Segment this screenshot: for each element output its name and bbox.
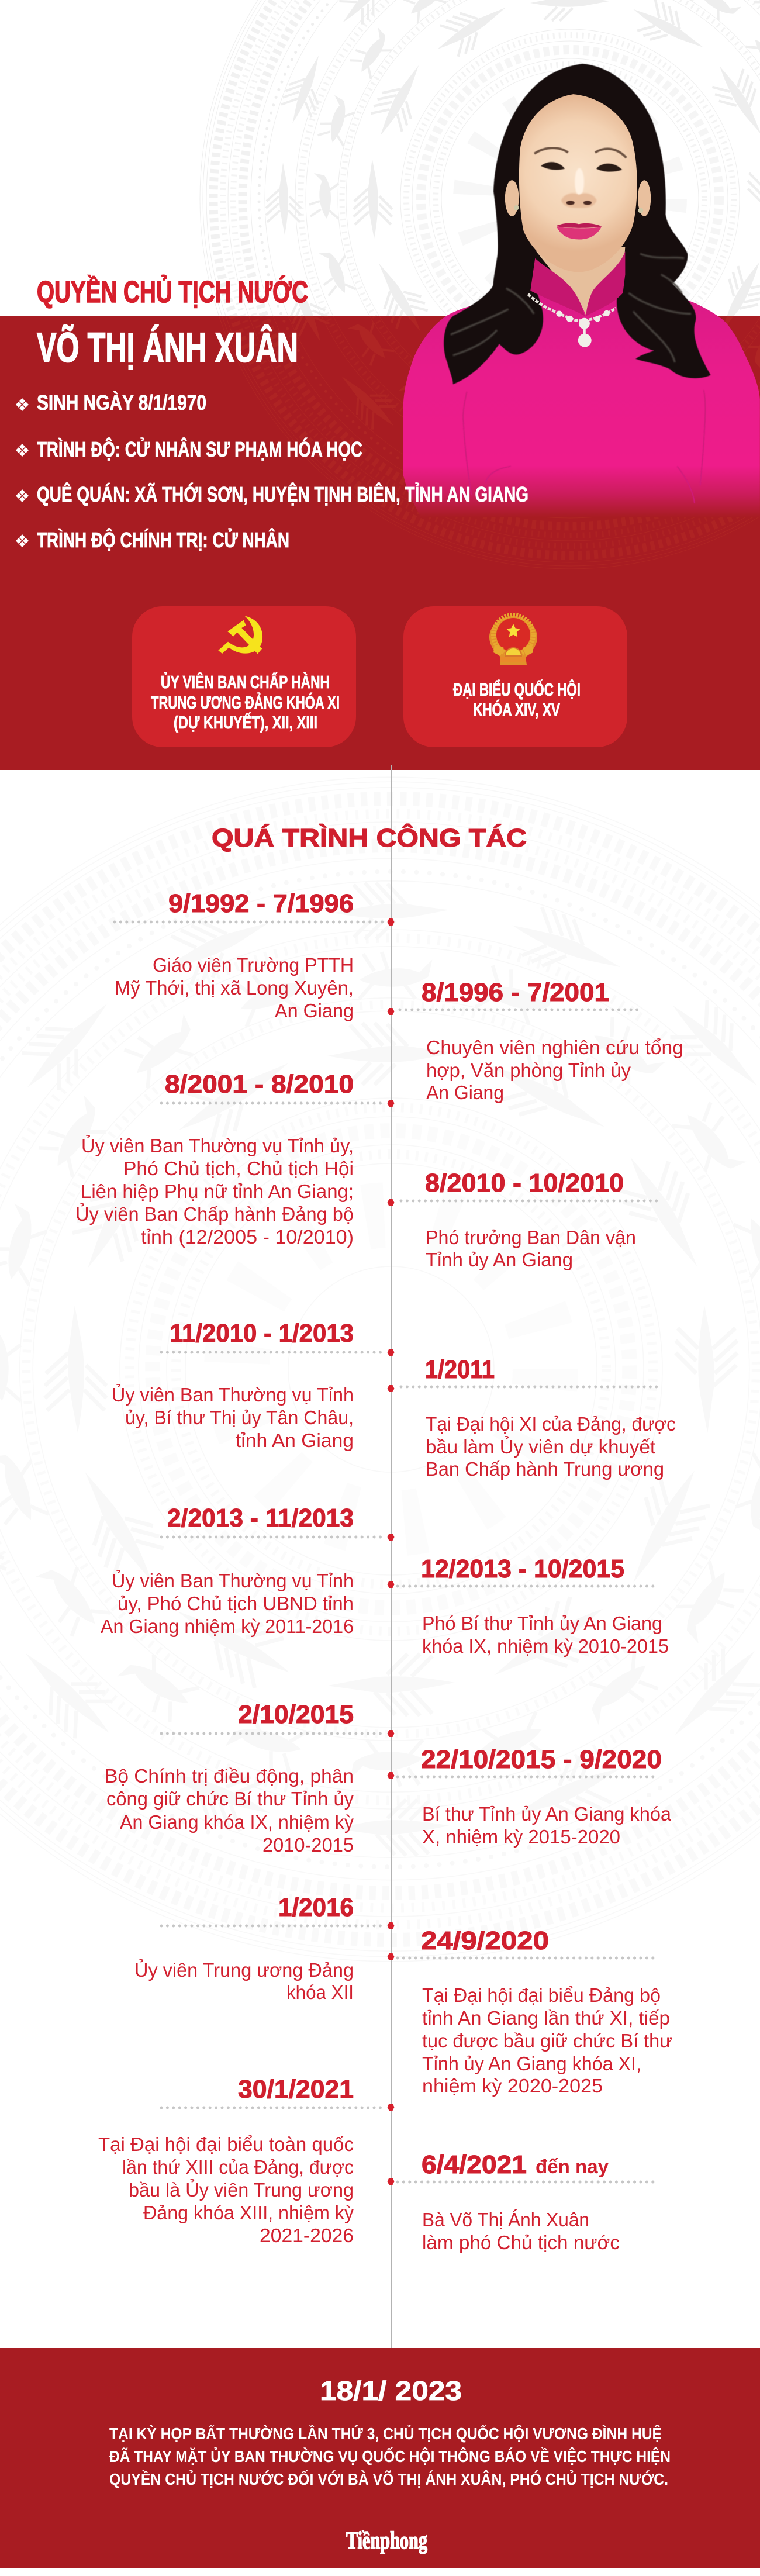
entry: 12/2013 - 10/2015	[387, 1555, 669, 1657]
panel: footer	[0, 2348, 760, 2568]
entry: 8/2010 - 10/2010	[387, 1169, 658, 1270]
entry: 8/2001 - 8/2010: 8/2001 - 8/2010	[165, 1070, 354, 1099]
entry: 2/2013 - 11/2013: 2/2013 - 11/2013	[167, 1504, 354, 1532]
red header band	[0, 316, 760, 770]
entry: 1/2011: Ban Chấp hành Trung ương	[426, 1458, 664, 1480]
bio list	[16, 391, 528, 552]
footer text	[109, 2424, 671, 2488]
entry: 30/1/2021: 30/1/2021	[238, 2075, 354, 2104]
entry: 22/10/2015 - 9/2020: Bí thư Tỉnh ủy An Giang khóa	[422, 1803, 672, 1825]
logo: Tien Phong: Tiềnphong	[346, 2527, 427, 2554]
entry: 24/9/2020: Tỉnh ủy An Giang khóa XI,	[422, 2053, 641, 2074]
entry: 6/4/2021 to present: 6/4/2021	[422, 2150, 527, 2179]
lips	[556, 223, 602, 228]
entry: 1/2016	[134, 1893, 394, 2003]
entry: 8/1996 - 7/2001: Chuyên viên nghiên cứu tổng	[426, 1037, 683, 1058]
entry: 2/10/2015: 2010-2015	[262, 1834, 354, 1856]
entry: 9/1992 - 7/1996: Giáo viên Trường PTTH	[153, 954, 354, 976]
card text: ĐẠI BIỂU QUỐC HỘI	[453, 679, 581, 700]
entry: 1/2016: Ủy viên Trung ương Đảng	[134, 1959, 354, 1981]
entry: 8/2001 - 8/2010: Ủy viên Ban Chấp hành Đảng bộ	[75, 1203, 354, 1225]
bio item: hometown: QUÊ QUÁN: XÃ THỚI SƠN, HUYỆN TỊNH BIÊN, TỈNH AN GIANG	[37, 482, 528, 506]
entry: 24/9/2020: tục được bầu giữ chức Bí thư	[422, 2030, 672, 2052]
entry: 2/10/2015: An Giang khóa IX, nhiệm kỳ	[120, 1811, 354, 1833]
nose	[561, 193, 597, 208]
footer text: ĐÃ THAY MẶT ỦY BAN THƯỜNG VỤ QUỐC HỘI THÔNG BÁO VỀ VIỆC THỰC HIỆN	[109, 2447, 671, 2465]
entry: 2/10/2015: công giữ chức Bí thư Tỉnh ủy	[106, 1788, 354, 1810]
heading: career: QUÁ TRÌNH CÔNG TÁC	[212, 823, 527, 852]
entry: 30/1/2021: lần thứ XIII của Đảng, được	[122, 2156, 354, 2178]
entry: 8/1996 - 7/2001: 8/1996 - 7/2001	[422, 978, 609, 1007]
entry: 9/1992 - 7/1996: 9/1992 - 7/1996	[168, 889, 354, 918]
entry: 6/4/2021 to present	[387, 2150, 655, 2253]
background drum pattern on red	[219, 316, 760, 569]
ao dai body	[403, 274, 760, 517]
footer text: QUYỀN CHỦ TỊCH NƯỚC ĐỐI VỚI BÀ VÕ THỊ ÁNH XUÂN, PHÓ CHỦ TỊCH NƯỚC.	[109, 2470, 668, 2488]
footer text: TẠI KỲ HỌP BẤT THƯỜNG LẦN THỨ 3, CHỦ TỊCH QUỐC HỘI VƯƠNG ĐÌNH HUỆ	[109, 2424, 662, 2443]
ears	[505, 180, 519, 216]
icon: hammer and sickle	[218, 616, 262, 654]
entry: 2/2013 - 11/2013	[101, 1504, 394, 1637]
entry: 12/2013 - 10/2015: 12/2013 - 10/2015	[421, 1555, 624, 1583]
entry: 8/1996 - 7/2001: An Giang	[426, 1082, 504, 1103]
entry: 24/9/2020	[387, 1926, 672, 2097]
entry: 6/4/2021 to present: làm phó Chủ tịch nước	[422, 2232, 620, 2253]
collar	[530, 251, 625, 316]
entry: 24/9/2020: tỉnh An Giang lần thứ XI, tiếp	[422, 2007, 670, 2029]
entry: 1/2016: 1/2016	[278, 1893, 354, 1922]
entry: 6/4/2021 to present: Bà Võ Thị Ánh Xuân	[422, 2209, 589, 2230]
neck	[536, 247, 625, 315]
entry: 30/1/2021: 2021-2026	[260, 2225, 354, 2246]
icon: national emblem	[489, 615, 537, 665]
hair	[444, 64, 711, 384]
entry: 11/2010 - 1/2013: Ủy viên Ban Thường vụ Tỉnh	[112, 1384, 354, 1406]
background drum pattern timeline	[0, 777, 760, 1962]
entry: 24/9/2020: Tại Đại hội đại biểu Đảng bộ	[422, 1984, 661, 2006]
nose highlight	[575, 168, 584, 196]
entry: 11/2010 - 1/2013	[112, 1319, 394, 1451]
entry: 8/2001 - 8/2010	[75, 1070, 394, 1248]
bio item: birth: SINH NGÀY 8/1/1970	[37, 391, 206, 415]
entry: 8/2001 - 8/2010: Liên hiệp Phụ nữ tỉnh An Giang;	[81, 1180, 354, 1202]
card text: ỦY VIÊN BAN CHẤP HÀNH	[161, 671, 330, 692]
entry: 24/9/2020: 24/9/2020	[421, 1926, 549, 1955]
entry: 11/2010 - 1/2013: 11/2010 - 1/2013	[170, 1319, 354, 1348]
entry: 12/2013 - 10/2015: Phó Bí thư Tỉnh ủy An Giang	[422, 1612, 662, 1634]
entry: 22/10/2015 - 9/2020	[387, 1745, 672, 1848]
entry: 8/1996 - 7/2001	[387, 978, 683, 1103]
entry: 22/10/2015 - 9/2020: X, nhiệm kỳ 2015-2020	[422, 1826, 620, 1848]
entry: 8/2001 - 8/2010: Ủy viên Ban Thường vụ Tỉnh ủy,	[81, 1135, 354, 1156]
card: national assembly: KHÓA XIV, XV	[473, 699, 560, 720]
entry: 24/9/2020: nhiệm kỳ 2020-2025	[422, 2075, 603, 2097]
entry: 2/10/2015: Bộ Chính trị điều động, phân	[105, 1765, 354, 1787]
entry: 2/10/2015	[105, 1700, 394, 1856]
earrings	[514, 205, 519, 210]
entry: 8/2010 - 10/2010: 8/2010 - 10/2010	[425, 1169, 624, 1197]
entry: 11/2010 - 1/2013: tỉnh An Giang	[236, 1429, 354, 1451]
entry: 9/1992 - 7/1996: Mỹ Thới, thị xã Long Xuyên,	[115, 977, 354, 999]
card: party central committee: (DỰ KHUYẾT), XII, XIII	[174, 712, 317, 733]
entry: 2/2013 - 11/2013: An Giang nhiệm kỳ 2011-2016	[101, 1615, 354, 1637]
entry: 1/2011: Tại Đại hội XI của Đảng, được	[426, 1413, 676, 1435]
portrait	[403, 64, 760, 517]
card: party central committee	[132, 606, 356, 747]
heading: role: QUYỀN CHỦ TỊCH NƯỚC	[37, 275, 308, 309]
entry: 30/1/2021: bầu là Ủy viên Trung ương	[129, 2179, 354, 2201]
entry: 1/2016: khóa XII	[286, 1981, 354, 2003]
entry: 8/2001 - 8/2010: tỉnh (12/2005 - 10/2010)	[141, 1226, 354, 1248]
entry: 30/1/2021: Tại Đại hội đại biểu toàn quốc	[98, 2133, 354, 2155]
necklace	[528, 294, 616, 347]
entry: 1/2011	[387, 1355, 676, 1480]
eyebrows	[534, 148, 626, 158]
entry: 6/4/2021 to present: đến nay	[536, 2156, 609, 2177]
background drum pattern top	[200, 0, 760, 316]
bio item: political level: TRÌNH ĐỘ CHÍNH TRỊ: CỬ NHÂN	[37, 527, 289, 552]
entry: 8/2010 - 10/2010: Phó trưởng Ban Dân vận	[426, 1227, 636, 1248]
panel: profile header	[0, 0, 760, 770]
entry: 30/1/2021: Đảng khóa XIII, nhiệm kỳ	[143, 2202, 354, 2223]
heading: name: VÕ THỊ ÁNH XUÂN	[37, 324, 298, 371]
entry: 1/2011: bầu làm Ủy viên dự khuyết	[426, 1436, 655, 1458]
bio item: education: TRÌNH ĐỘ: CỬ NHÂN SƯ PHẠM HÓA HỌC	[37, 437, 362, 461]
entry: 1/2011: 1/2011	[425, 1355, 495, 1384]
timeline axis	[391, 765, 392, 2348]
footer date: 18/1/ 2023	[320, 2375, 462, 2406]
eyes	[541, 162, 622, 172]
entry: 8/1996 - 7/2001: hợp, Văn phòng Tỉnh ủy	[426, 1059, 631, 1081]
entry: 2/10/2015: 2/10/2015	[238, 1700, 354, 1729]
entry: 11/2010 - 1/2013: ủy, Bí thư Thị ủy Tân Châu,	[125, 1407, 354, 1428]
face	[519, 94, 637, 272]
panel: timeline	[75, 765, 683, 2348]
entry: 2/2013 - 11/2013: Ủy viên Ban Thường vụ Tỉnh	[112, 1570, 354, 1591]
entry: 8/2010 - 10/2010: Tỉnh ủy An Giang	[426, 1249, 573, 1270]
entry: 9/1992 - 7/1996	[115, 889, 394, 1021]
entry: 8/2001 - 8/2010: Phó Chủ tịch, Chủ tịch Hội	[123, 1158, 354, 1179]
entry: 9/1992 - 7/1996: An Giang	[275, 1000, 354, 1021]
entry: 2/2013 - 11/2013: ủy, Phó Chủ tịch UBND tỉnh	[118, 1593, 354, 1614]
entry: 30/1/2021	[98, 2075, 394, 2246]
card: party central committee: TRUNG ƯƠNG ĐẢNG KHÓA XI	[151, 692, 340, 713]
card: national assembly	[403, 606, 627, 747]
entry: 22/10/2015 - 9/2020: 22/10/2015 - 9/2020	[421, 1745, 662, 1774]
entry: 12/2013 - 10/2015: khóa IX, nhiệm kỳ 2010-2015	[422, 1635, 669, 1657]
